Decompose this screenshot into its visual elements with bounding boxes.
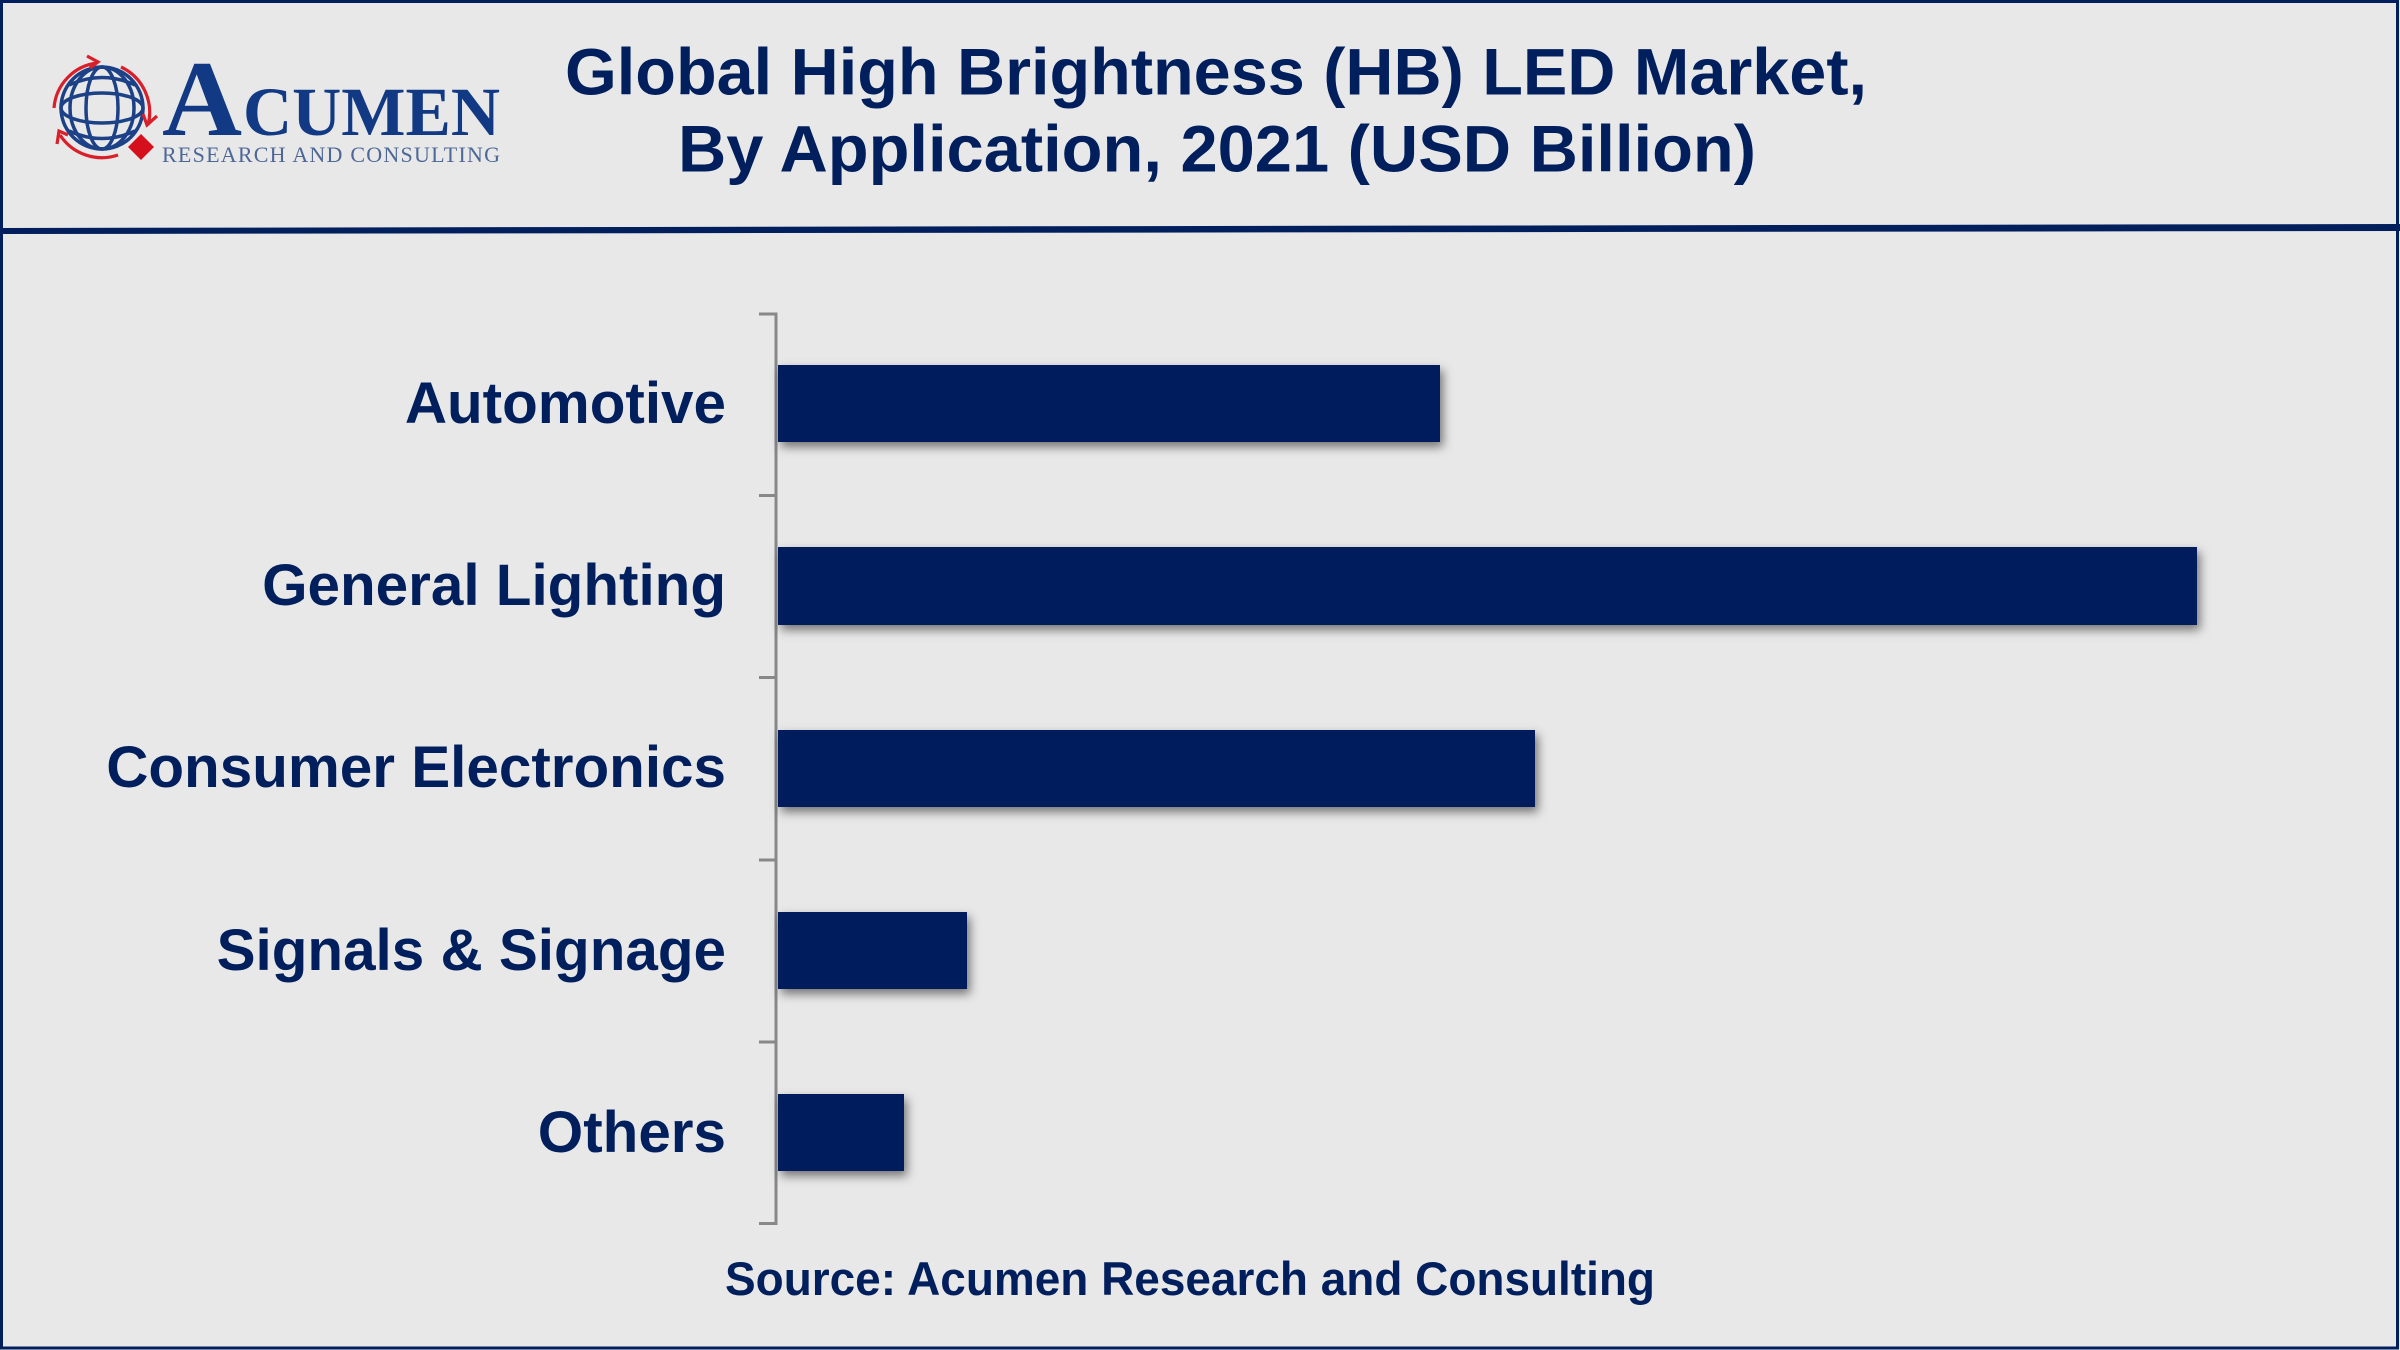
category: Automotive: Automotive (405, 371, 726, 436)
category: Others: Others (538, 1100, 726, 1165)
source note: Source: Acumen Research and Consulting (725, 1253, 1655, 1306)
header divider (0, 224, 2400, 234)
category: Consumer Electronics (106, 730, 1535, 807)
vertical axis (759, 314, 776, 1224)
category: Signals & Signage: Signals & Signage (217, 918, 726, 983)
title: Global High Brightness (HB) LED Market, (565, 34, 1867, 108)
logo tagline: RESEARCH AND CONSULTING (162, 142, 500, 167)
logo wordmark: A (162, 40, 242, 159)
title second line: By Application, 2021 (USD Billion) (678, 112, 1756, 186)
category: General Lighting (262, 547, 2197, 625)
category: Others (538, 1094, 904, 1171)
logo: Acumen Research and Consulting: CUMEN (243, 74, 500, 150)
bar chart (106, 314, 2197, 1224)
category: Signals & Signage (217, 912, 967, 989)
icon: globe with red arrows (54, 56, 157, 160)
logo: Acumen Research and Consulting (54, 40, 500, 167)
category: General Lighting: General Lighting (262, 553, 726, 618)
category: Automotive (405, 365, 1440, 442)
category: Consumer Electronics: Consumer Electronics (106, 735, 726, 800)
